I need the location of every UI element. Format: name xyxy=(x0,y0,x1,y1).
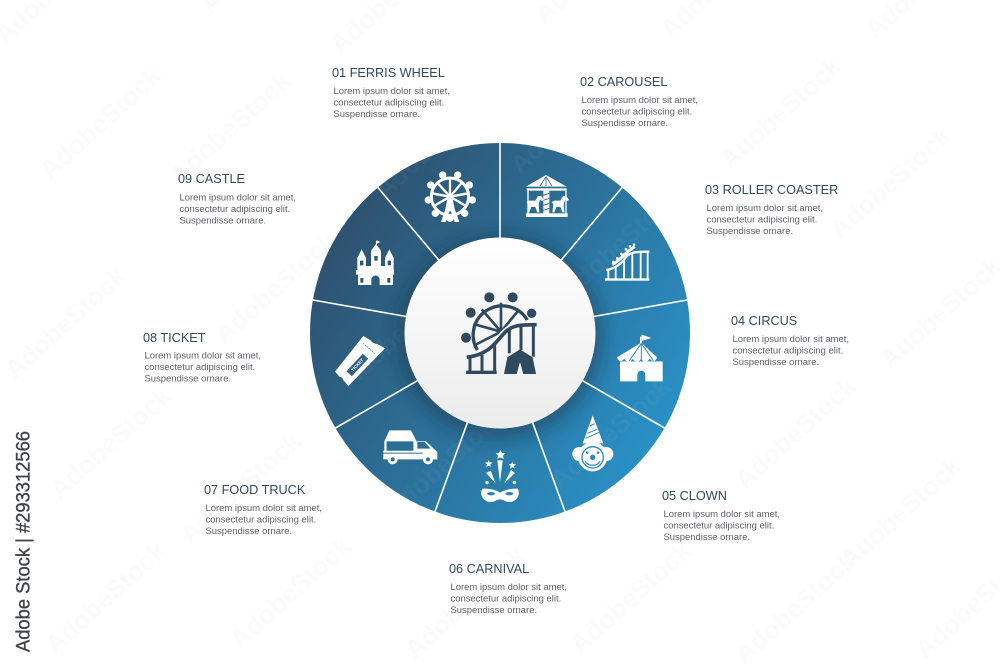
watermark pattern: AdobeStock xyxy=(209,225,342,349)
icon: food truck xyxy=(383,430,437,464)
text block: 07 food truck xyxy=(204,483,322,537)
donut chart with nine segments xyxy=(310,55,690,524)
watermark pattern: AdobeStock xyxy=(174,425,307,549)
text block: 09 castle: Suspendisse ornare. xyxy=(180,216,266,226)
text block: 07 food truck: Suspendisse ornare. xyxy=(206,526,292,537)
text block: 04 circus: 04 CIRCUS xyxy=(731,314,797,328)
donut chart with nine segments: AdobeStock xyxy=(334,270,467,394)
text block: 04 circus: consectetur adipiscing elit. xyxy=(732,346,843,356)
text block: 08 ticket: 08 TICKET xyxy=(143,331,206,345)
watermark pattern: AdobeStock xyxy=(729,545,862,667)
icon: carousel xyxy=(526,175,569,217)
text block: 08 ticket xyxy=(143,331,261,384)
text block: 09 castle: 09 CASTLE xyxy=(178,172,245,186)
text block: 02 carousel: consectetur adipiscing elit. xyxy=(582,106,692,118)
icon: roller coaster xyxy=(605,243,649,281)
text block: 01 ferris wheel xyxy=(332,66,450,120)
text block: 06 carnival: 06 CARNIVAL xyxy=(449,562,529,576)
text block: 03 roller coaster: Lorem ipsum dolor sit amet, xyxy=(706,203,823,214)
text block: 06 carnival: Lorem ipsum dolor sit amet, xyxy=(450,582,567,593)
text block: 09 castle: Lorem ipsum dolor sit amet, xyxy=(180,192,296,204)
text block: 04 circus: Lorem ipsum dolor sit amet, xyxy=(732,334,849,345)
donut chart with nine segments: AdobeStock xyxy=(379,400,512,524)
icon: circus tent xyxy=(617,335,663,381)
text block: 05 clown: Lorem ipsum dolor sit amet, xyxy=(664,509,780,520)
text block: 02 carousel: Suspendisse ornare. xyxy=(582,118,668,129)
text block: 01 ferris wheel: consectetur adipiscing elit. xyxy=(334,98,444,108)
text block: 02 carousel: 02 CAROUSEL xyxy=(580,75,667,89)
text block: 09 castle xyxy=(178,172,296,226)
donut chart with nine segments: AdobeStock xyxy=(554,180,687,304)
donut chart with nine segments: AdobeStock xyxy=(369,80,502,204)
watermark pattern: AdobeStock xyxy=(164,65,297,189)
text block: 01 ferris wheel: 01 FERRIS WHEEL xyxy=(332,66,445,80)
watermark pattern: AdobeStock xyxy=(44,380,177,504)
text block: 03 roller coaster: consectetur adipiscing elit. xyxy=(706,214,817,226)
text block: 08 ticket: Suspendisse ornare. xyxy=(144,374,231,384)
watermark pattern: AdobeStock xyxy=(714,50,847,174)
text block: 02 carousel: Lorem ipsum dolor sit amet, xyxy=(582,95,698,106)
text block: 07 food truck: consectetur adipiscing elit. xyxy=(206,514,316,526)
text block: 01 ferris wheel: Lorem ipsum dolor sit amet, xyxy=(334,86,450,97)
text block: 01 ferris wheel: Suspendisse ornare. xyxy=(334,109,420,120)
stock credit: Adobe Stock | #293312566 xyxy=(14,431,34,652)
text block: 05 clown xyxy=(662,489,780,543)
text block: 06 carnival xyxy=(449,562,567,616)
text block: 04 circus: Suspendisse ornare. xyxy=(732,357,819,368)
watermark pattern: AdobeStock xyxy=(834,450,967,574)
watermark pattern: AdobeStock xyxy=(224,530,357,654)
watermark pattern: AdobeStock xyxy=(824,120,957,244)
text block: 07 food truck: 07 FOOD TRUCK xyxy=(204,483,306,497)
text block: 08 ticket: Lorem ipsum dolor sit amet, xyxy=(144,350,261,362)
icon: clown xyxy=(572,415,613,471)
text block: 03 roller coaster: Suspendisse ornare. xyxy=(706,226,793,237)
donut chart with nine segments: AdobeStock xyxy=(544,370,677,494)
donut chart with nine segments: AdobeStock xyxy=(504,55,637,179)
icon: ticket: TICKET xyxy=(350,357,365,372)
icon: ticket xyxy=(335,336,385,386)
text block: 08 ticket: consectetur adipiscing elit. xyxy=(144,362,255,373)
watermark pattern: AdobeStock xyxy=(34,60,167,184)
icon: castle xyxy=(356,240,394,285)
text block: 09 castle: consectetur adipiscing elit. xyxy=(180,204,290,215)
text block: 05 clown: consectetur adipiscing elit. xyxy=(664,520,774,532)
watermark pattern: AdobeStock xyxy=(399,540,532,664)
icon: carnival mask and fireworks xyxy=(481,450,519,502)
text block: 07 food truck: Lorem ipsum dolor sit amet, xyxy=(206,503,322,514)
watermark pattern: AdobeStock xyxy=(729,370,862,494)
icon: central amusement park emblem xyxy=(461,292,537,374)
text block: 05 clown: 05 CLOWN xyxy=(662,489,727,503)
text block: 04 circus xyxy=(731,314,849,368)
text block: 03 roller coaster xyxy=(705,183,838,237)
text block: 03 roller coaster: 03 ROLLER COASTER xyxy=(705,183,838,197)
watermark pattern: AdobeStock xyxy=(0,260,132,384)
text block: 06 carnival: Suspendisse ornare. xyxy=(450,605,537,616)
text block: 05 clown: Suspendisse ornare. xyxy=(664,532,750,543)
watermark pattern: AdobeStock xyxy=(39,535,172,659)
icon: ferris wheel xyxy=(425,171,476,222)
text block: 06 carnival: consectetur adipiscing elit. xyxy=(450,594,561,604)
watermark pattern: AdobeStock xyxy=(564,535,697,659)
text block: 02 carousel xyxy=(580,75,698,129)
